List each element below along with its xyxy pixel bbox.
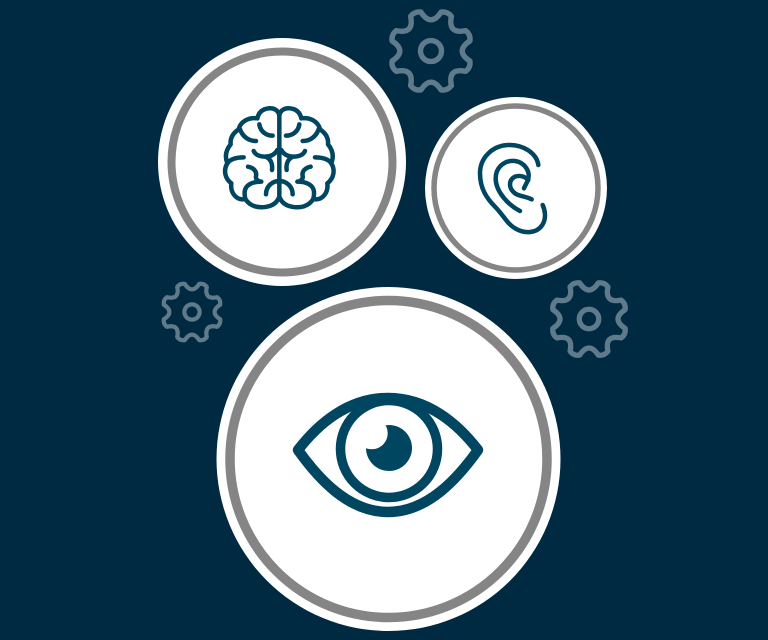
icon: brain	[225, 108, 334, 207]
icon: left gear	[164, 284, 220, 340]
icon: top gear	[392, 12, 470, 90]
panel: brain circle	[158, 38, 406, 286]
icon: eye	[298, 398, 478, 512]
icon: ear	[480, 145, 545, 232]
icon: right gear	[553, 283, 625, 355]
panel: ear circle	[425, 97, 607, 279]
panel: eye circle	[216, 287, 560, 631]
